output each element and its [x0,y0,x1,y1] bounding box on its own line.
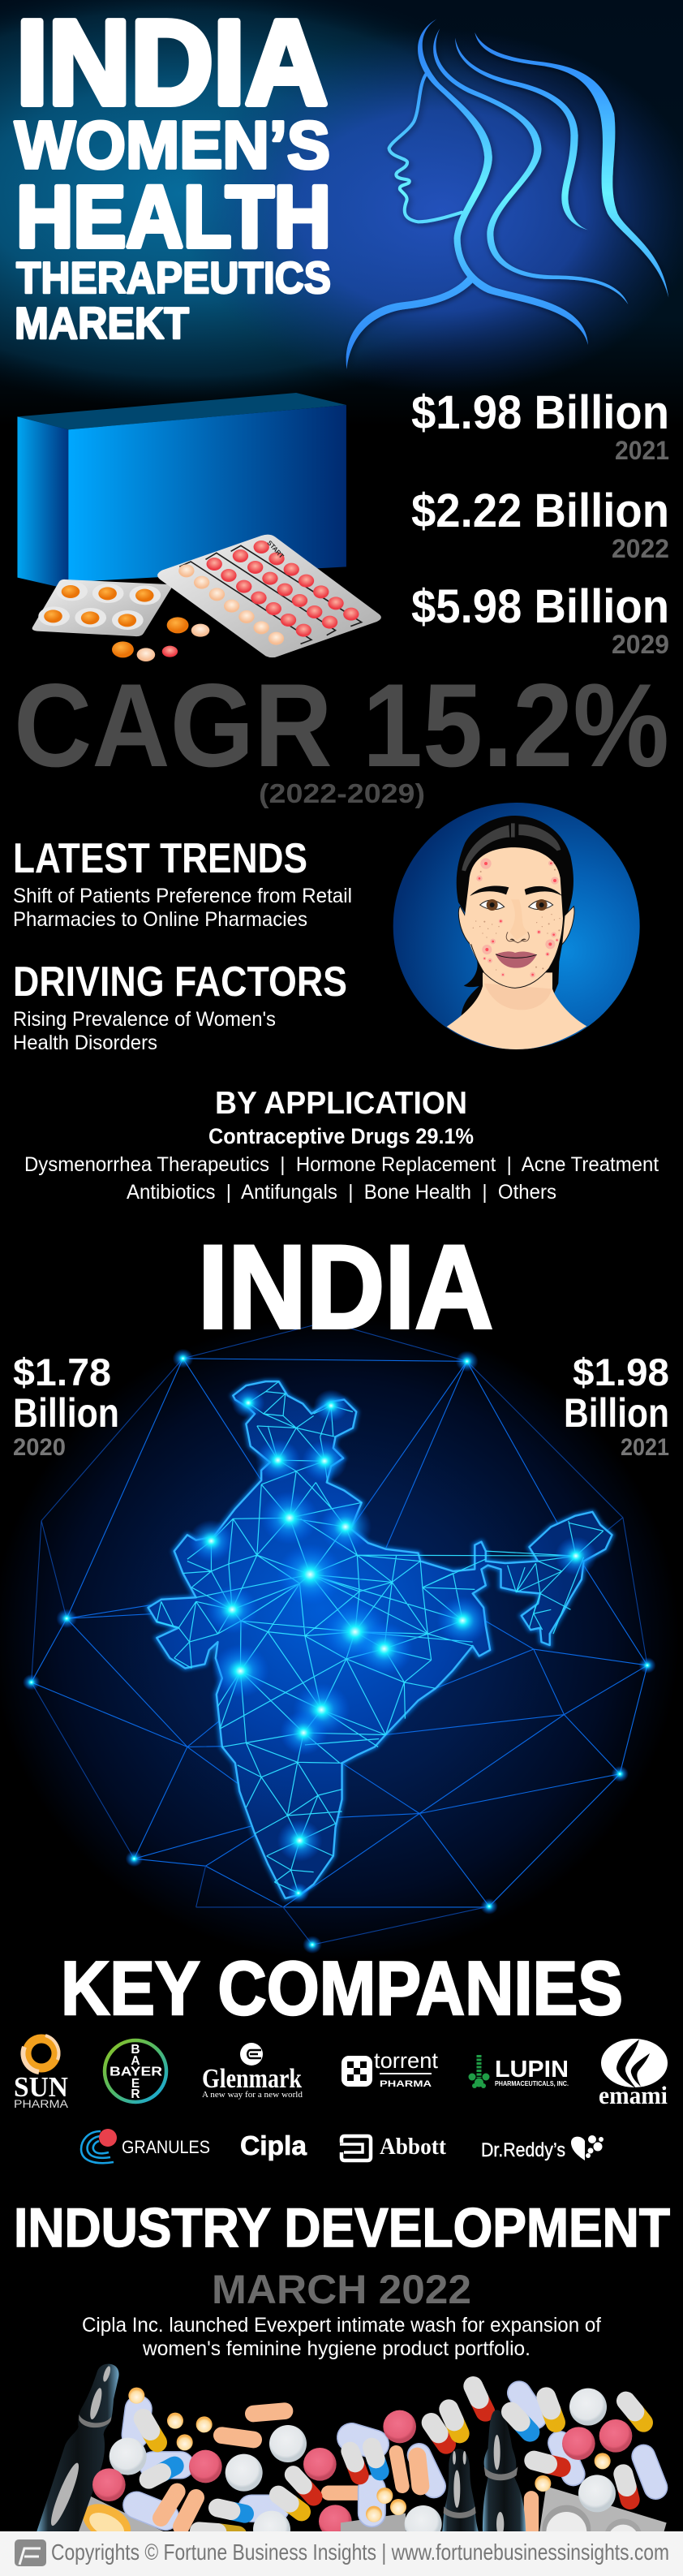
application list: Dysmenorrhea Therapeutics | Hormone Replacement | Acne Treatment [24,1153,659,1176]
application list: Antibiotics | Antifungals | Bone Health | Others [127,1181,556,1204]
glowing nodes [23,1349,656,1954]
market value 2022: $2.22 Billion [411,485,669,537]
outer network lines [32,1323,647,1945]
peach capsules [161,2411,361,2526]
logo: Sun Pharma: SUN [14,2071,68,2103]
illustration: pills left half [37,2363,359,2531]
development date: MARCH 2022 [212,2267,471,2312]
flat blue-white pills [351,2393,655,2514]
icon: Fortune Business Insights logo [15,2539,46,2566]
key companies heading: KEY COMPANIES [61,1945,623,2031]
India land [148,1381,612,1898]
nose [506,932,529,943]
eyebrows [470,886,509,896]
logo: Abbott [340,2134,447,2160]
map glow background [0,1315,680,1961]
India outline glow [148,1381,612,1898]
India value 2021: 2021 [621,1434,669,1461]
white capsule halves [350,2397,635,2487]
leading segment: Contraceptive Drugs 29.1% [208,1124,474,1148]
foil packs [341,2487,667,2531]
market value 2022: 2022 [612,534,669,563]
India value 2020 [13,1350,119,1461]
hair sheen [462,823,561,871]
logo: Sun Pharma: PHARMA [14,2097,69,2110]
ears [458,907,470,944]
icon: blister packs and loose pills [32,535,381,661]
small orange blister [32,579,172,636]
title: WOMEN’S [15,107,330,183]
tall ampoule [483,2410,526,2536]
driving factors block [13,958,347,1054]
mesh lines [157,1381,604,1893]
latest trends block: Shift of Patients Preference from Retail [13,885,352,907]
title [15,0,331,348]
logo: Dr. Reddy's [481,2135,604,2161]
logo: Emami: * [662,2083,667,2096]
market value 2029 [411,580,669,659]
logo: Granules [81,2129,210,2163]
peach capsules [396,2453,531,2534]
flat blue-white pills [135,2409,276,2517]
logo: Abbott: Abbott [380,2134,447,2160]
market value 2021: $1.98 Billion [411,386,669,439]
logo: Emami: emami [599,2081,668,2109]
white capsule halves [144,2419,303,2532]
logo: Lupin: LUPIN [495,2057,569,2083]
driving factors block: Rising Prevalence of Women's [13,1008,276,1031]
logo: Torrent Pharma [342,2048,438,2089]
eyes [480,900,505,910]
tablets behind [405,2389,616,2543]
title: HEALTH [16,167,331,265]
India heading: INDIA [198,1221,493,1353]
logo: Torrent Pharma: torrent [374,2048,438,2073]
logo: Bayer: R [131,2087,140,2101]
loose pills [112,617,209,661]
India value 2021 [564,1350,669,1461]
logo: Lupin [469,2055,569,2088]
market value 2021: 2021 [615,436,669,465]
application list [24,1153,659,1204]
latest trends block: LATEST TRENDS [13,835,307,882]
market value 2021 [411,386,669,465]
logo: Torrent Pharma: PHARMA [380,2079,432,2089]
short ampoule [442,2449,479,2532]
jaw line [471,944,561,988]
logo: Bayer: A [131,2054,140,2068]
logo: Bayer: BAYER [110,2065,163,2079]
highlights [47,2365,112,2528]
footer bar [0,2531,683,2576]
acne glow [476,858,559,977]
logo: Bayer: B [131,2043,140,2057]
text: START label on blister: START [266,539,286,560]
header panel [0,0,683,426]
India value 2020: 2020 [13,1434,66,1461]
latest trends block: Pharmacies to Online Pharmacies [13,908,307,931]
market value 2029: 2029 [612,630,669,659]
small yellow pills [128,2388,213,2450]
latest trends block [13,835,352,931]
development description: Cipla Inc. launched Evexpert intimate wash for expansion of [82,2314,601,2337]
red capsule behind ampoule [473,2386,485,2412]
logo: Sun Pharma [14,2035,69,2110]
market value 2022 [411,485,669,563]
white tablets [109,2425,307,2531]
illustration: pills right half [341,2386,667,2557]
neck shadow [484,984,552,1010]
logo: Bayer: E [131,2077,140,2091]
coloured capsule halves [355,2410,643,2500]
logo: Glenmark: Glenmark [202,2064,302,2094]
title: MAREKT [15,298,189,348]
acne centres [479,862,558,976]
logo: Dr. Reddy's: Dr.Reddy’s [481,2139,565,2161]
pink tablets [92,2448,352,2538]
India value 2021: $1.98 [573,1350,669,1394]
icon: woman profile line art [346,19,668,369]
cheek shading [509,899,529,940]
logo: Glenmark: A new way for a new world [202,2091,303,2100]
driving factors block: Health Disorders [13,1032,157,1054]
logo: Granules: GRANULES [122,2137,210,2157]
large contraceptive blister [157,535,381,657]
map panel: India network [0,1315,680,1961]
market value 2029: $5.98 Billion [411,580,669,633]
logo: Lupin: PHARMACEUTICALS, INC. [495,2080,569,2087]
development description [82,2314,601,2360]
development description: women's feminine hygiene product portfolio. [142,2337,531,2360]
icon: woman's face with acne in blue circle [393,803,640,1049]
ampoule [37,2364,119,2532]
logo: Cipla: Cipla [240,2130,307,2160]
logo: Emami [599,2039,668,2109]
neck and shoulders [447,972,586,1049]
foil pack with gold tablet [79,2496,164,2531]
coloured capsule halves [150,2431,314,2535]
collar [79,2414,111,2427]
freckles [473,869,561,971]
face [465,847,563,988]
small yellow pills [366,2453,611,2522]
logo: Bayer [105,2040,166,2102]
lips [496,951,537,968]
by application heading: BY APPLICATION [215,1086,467,1121]
India value 2020: Billion [13,1390,119,1436]
title: THERAPEUTICS [16,252,331,303]
icon: blue medicine box [17,393,346,589]
logo: Glenmark [202,2043,303,2100]
driving factors block: DRIVING FACTORS [13,958,347,1006]
CAGR period: (2022-2029) [259,778,425,808]
India value 2020: $1.78 [13,1350,111,1394]
hair [457,816,573,1017]
